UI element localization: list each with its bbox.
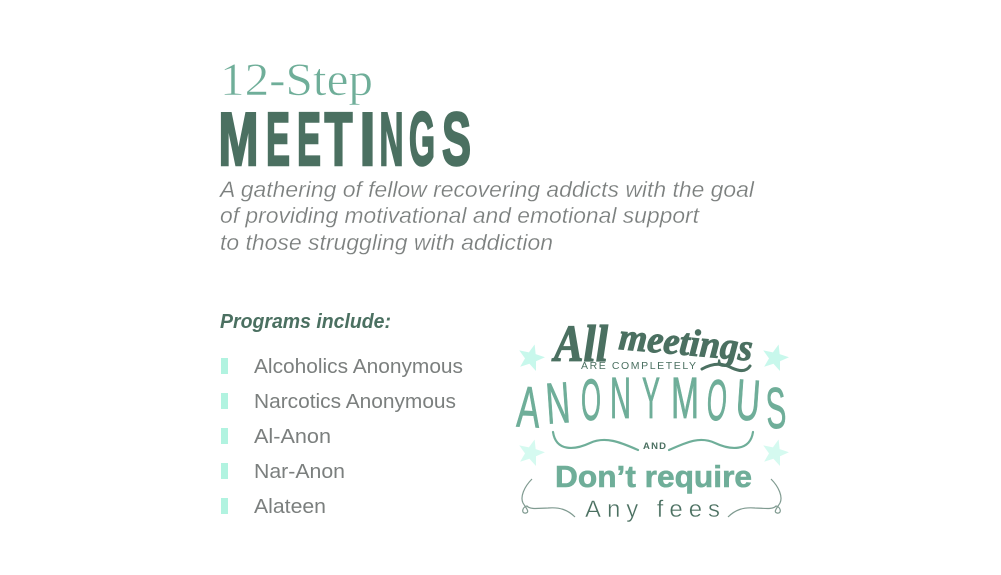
program list: [221, 356, 463, 518]
icon: star bottom right: [759, 436, 791, 467]
bullet: Alateen: [221, 498, 228, 514]
lettering: ANONYMOUS: U: [734, 367, 762, 434]
icon: star bottom left: [515, 436, 547, 467]
description text: [218, 177, 755, 255]
bullet: Narcotics Anonymous: [221, 393, 228, 409]
description text: A gathering of fellow recovering addicts with the goal: [218, 177, 755, 202]
flourish: left of and: [553, 432, 638, 450]
item: Narcotics Anonymous: Narcotics Anonymous: [254, 391, 456, 413]
title: MEETINGS: E: [266, 97, 290, 181]
heading: programs include: Programs include:: [220, 311, 391, 333]
title: MEETINGS: E: [297, 97, 321, 181]
lettering: Don't require: Don’t require: [555, 459, 752, 494]
bullet: Al-Anon: [221, 428, 228, 444]
flourish: right of and: [669, 432, 753, 450]
title: MEETINGS: T: [324, 97, 352, 181]
lettering: meetings: meetings: [617, 316, 754, 370]
bullet: Nar-Anon: [221, 463, 228, 479]
title: MEETINGS: S: [442, 97, 471, 181]
description text: to those struggling with addiction: [220, 230, 553, 255]
lettering: Any fees: Any fees: [585, 496, 720, 523]
item: Al-Anon: Al-Anon: [254, 426, 331, 448]
title: MEETINGS: G: [409, 97, 435, 181]
item: Alateen: Alateen: [254, 496, 326, 518]
icon: star top left: [515, 341, 547, 372]
lettering: ANONYMOUS: N: [544, 370, 572, 437]
lettering: ANONYMOUS: M: [671, 366, 699, 431]
lettering: ANONYMOUS: S: [764, 376, 788, 441]
flourish: bottom right: [728, 479, 781, 517]
bullet: Alcoholics Anonymous: [221, 358, 228, 374]
lettering: ANONYMOUS: A: [515, 374, 542, 441]
swash under meetings: [702, 364, 750, 371]
lettering: ANONYMOUS: [515, 366, 788, 441]
lettering: and: AND: [643, 441, 666, 452]
lettering: ANONYMOUS: Y: [642, 366, 660, 431]
title: MEETINGS: M: [218, 97, 258, 181]
description text: of providing motivational and emotional support: [220, 203, 700, 228]
item: Nar-Anon: Nar-Anon: [254, 461, 345, 483]
lettering: ANONYMOUS: O: [581, 368, 601, 433]
item: Alcoholics Anonymous: Alcoholics Anonymous: [254, 356, 463, 378]
lettering: All: All: [551, 316, 608, 373]
lettering: ANONYMOUS: O: [705, 367, 729, 434]
lettering: are completely: ARE COMPLETELY: [581, 360, 696, 372]
title: 12-Step: 12-Step: [220, 54, 373, 106]
lettering: ANONYMOUS: N: [610, 366, 631, 431]
title: MEETINGS: N: [380, 97, 404, 181]
title: MEETINGS: [218, 97, 471, 181]
flourish: bottom left: [522, 479, 575, 517]
title: MEETINGS: I: [360, 97, 376, 181]
icon: star top right: [759, 341, 791, 372]
badge: anonymous meetings lettering: [515, 316, 791, 523]
